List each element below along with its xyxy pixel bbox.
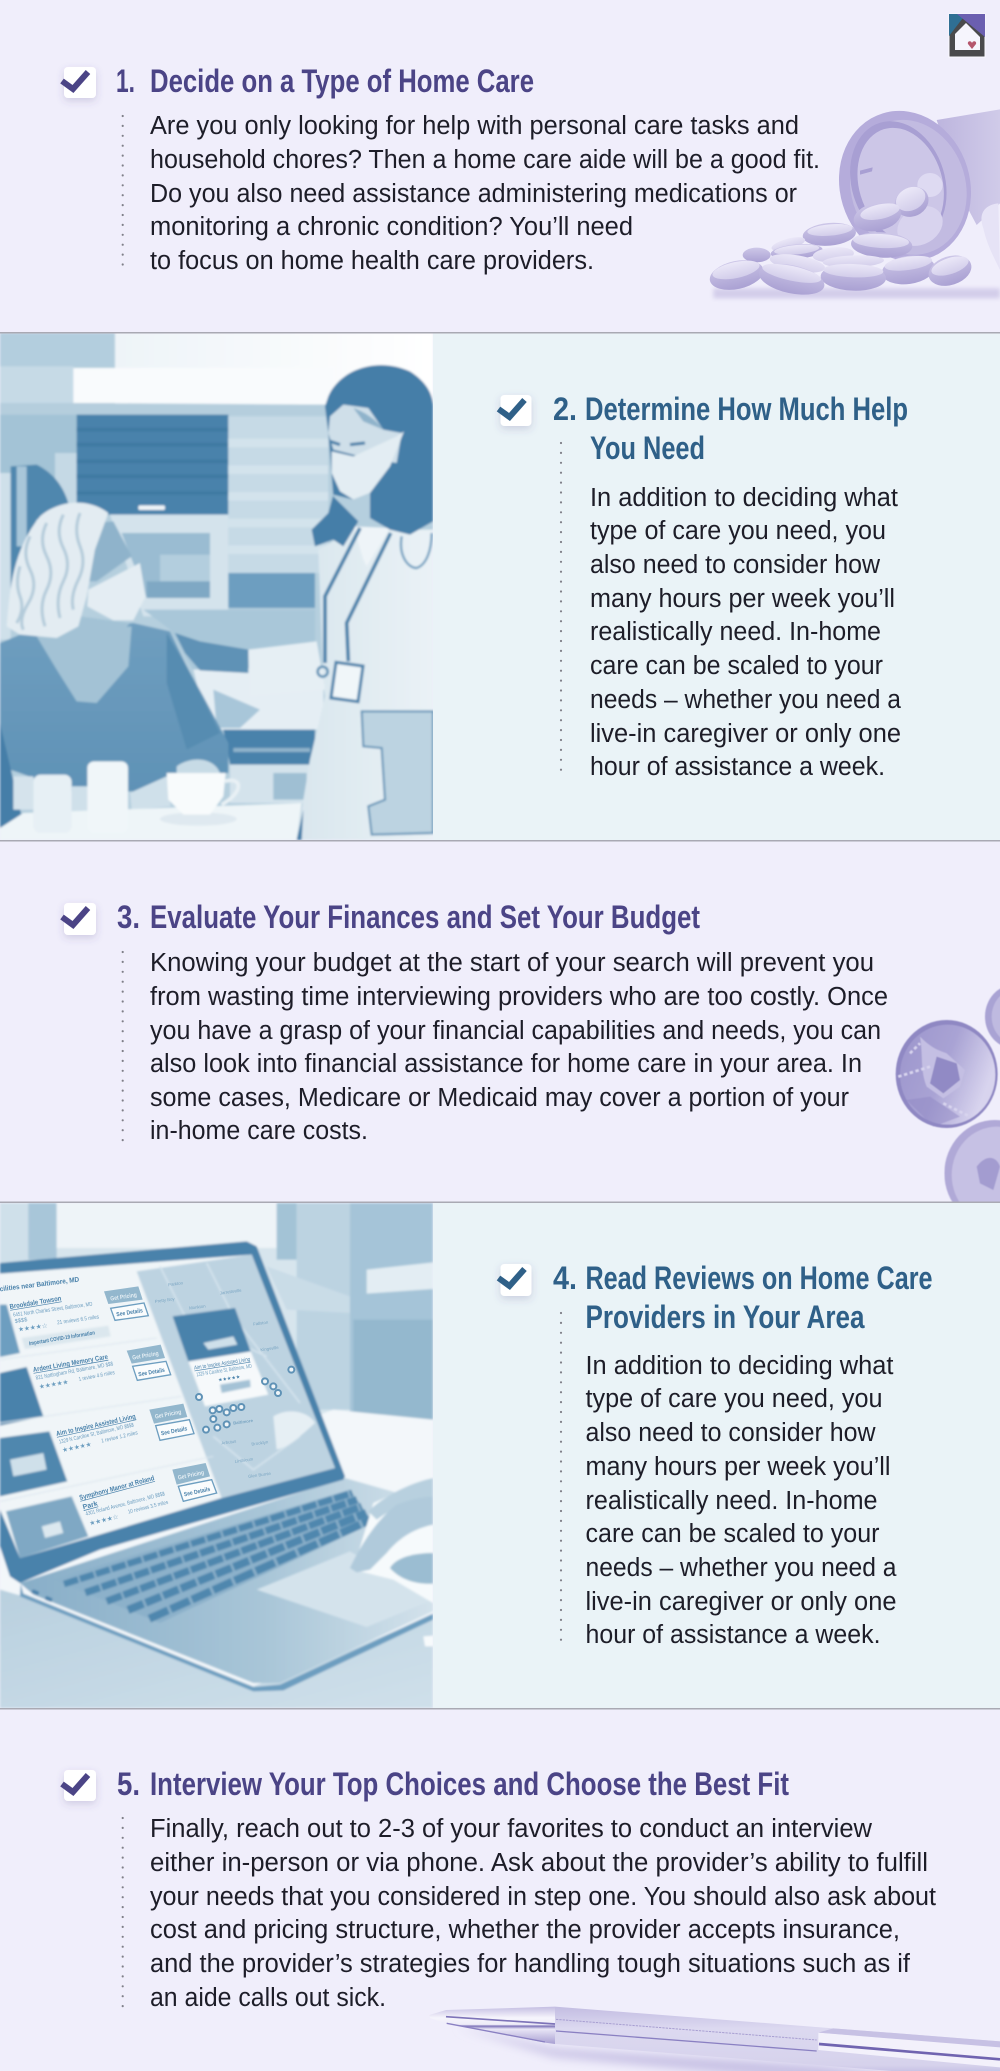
photo: laptop showing provider reviews: [0, 1203, 433, 1708]
body text: [590, 484, 902, 781]
image: coins: [895, 988, 1000, 1202]
listing text on screen: Aim to Inspire Assisted Living: [56, 1414, 137, 1438]
body text: and the provider’s strategies for handling tough situations such as if: [150, 1950, 911, 1978]
map labels: Parkton: [168, 1280, 184, 1287]
body text: many hours per week you’ll: [586, 1453, 890, 1481]
body text: you have a grasp of your financial capabilities and needs, you can: [150, 1017, 881, 1045]
heading: Interview Your Top Choices and Choose the Best Fit: [150, 1766, 789, 1802]
body text: needs – whether you need a: [586, 1554, 897, 1582]
panel: step 2 background: [433, 333, 1000, 840]
panel: step 3: [62, 899, 1000, 1227]
listing buttons: Get Pricing: [132, 1351, 160, 1362]
body text: many hours per week you’ll: [590, 585, 895, 613]
body text: your needs that you considered in step one. You should also ask about: [150, 1883, 936, 1911]
body text: [586, 1352, 897, 1649]
map labels: [154, 1280, 279, 1479]
map labels: Monkton: [189, 1303, 206, 1311]
body text: monitoring a chronic condition? You’ll need: [150, 213, 633, 241]
body text: care can be scaled to your: [590, 652, 883, 680]
body text: Do you also need assistance administering medications or: [150, 180, 797, 208]
listing text on screen: ★★★★★: [38, 1378, 69, 1391]
listing text on screen: Aim to Inspire Assisted Living: [194, 1357, 251, 1372]
heading: 3.: [117, 899, 140, 935]
heading: 2.: [553, 391, 577, 427]
heading: [553, 1260, 932, 1335]
listing text on screen: ★★★★☆: [17, 1322, 48, 1334]
heading: 1.: [116, 63, 135, 99]
heading: Providers in Your Area: [586, 1299, 865, 1335]
map labels: Baltimore: [233, 1418, 254, 1426]
panel: step 5: [62, 1766, 1000, 2071]
listing text on screen: Ardent Living Memory Care: [32, 1354, 109, 1374]
body text: type of care you need, you: [586, 1385, 882, 1413]
map labels: Linthicum: [234, 1456, 254, 1464]
listing text on screen: 1329 N Caroline St, Baltimore, MD: [196, 1364, 252, 1378]
listing text on screen: 21 reviews 6.5 miles: [57, 1314, 100, 1326]
panel: step 4 background: [433, 1203, 1000, 1708]
map pins: [196, 1367, 294, 1433]
body text: also need to consider how: [586, 1419, 876, 1447]
listing text on screen: [0, 1277, 252, 1528]
body text: household chores? Then a home care aide will be a good fit.: [150, 146, 820, 174]
listing text on screen: 1329 N Caroline St, Baltimore, MD $$$$: [58, 1422, 135, 1446]
check box: [62, 903, 96, 935]
listing buttons: Get Pricing: [177, 1470, 205, 1482]
map labels: Arbutus: [221, 1439, 237, 1446]
listing text on screen: 6451 North Charles Street, Baltimore, MD: [13, 1302, 93, 1319]
listing text on screen: ★★★★★: [218, 1374, 241, 1384]
body text: hour of assistance a week.: [586, 1621, 880, 1649]
image: spilled pill bottle: [707, 94, 1000, 300]
check box: [62, 1770, 96, 1801]
panel: step 2: [498, 391, 908, 781]
body text: an aide calls out sick.: [150, 1984, 386, 2012]
listing text on screen: $$$$: [14, 1317, 29, 1325]
body text: Finally, reach out to 2-3 of your favorites to conduct an interview: [150, 1815, 873, 1843]
body text: also look into financial assistance for home care in your area. In: [150, 1050, 862, 1078]
heading: Decide on a Type of Home Care: [150, 63, 534, 99]
body text: [150, 1815, 936, 2012]
body text: some cases, Medicare or Medicaid may cover a portion of your: [150, 1084, 849, 1112]
photo: caregiver and senior woman: [0, 333, 433, 840]
body text: from wasting time interviewing providers who are too costly. Once: [150, 983, 888, 1011]
listing text on screen: Important COVID-19 Information: [29, 1330, 96, 1347]
check box: [498, 395, 532, 426]
image: pen: [429, 2007, 1000, 2071]
listing text on screen: cilities near Baltimore, MD: [0, 1277, 80, 1293]
map labels: Glen Burnie: [248, 1471, 272, 1479]
body text: type of care you need, you: [590, 517, 886, 545]
listing text on screen: Brookdale Towson: [9, 1295, 62, 1311]
listing text on screen: Symphony Manor at Roland: [79, 1475, 155, 1502]
map labels: Jarrettsville: [219, 1288, 242, 1296]
panel: step 1: [62, 63, 1000, 300]
heading: You Need: [590, 430, 705, 466]
body text: [150, 949, 888, 1145]
panel: step 4: [498, 1260, 932, 1649]
listing text on screen: 4301 Roland Avenue, Baltimore, MD $$$$: [85, 1491, 166, 1518]
map labels: Pretty Boy: [154, 1296, 176, 1304]
logo: house with heart: [949, 14, 985, 57]
body text: needs – whether you need a: [590, 686, 902, 714]
body text: hour of assistance a week.: [590, 753, 885, 781]
body text: either in-person or via phone. Ask about the provider’s ability to fulfill: [150, 1849, 928, 1877]
body text: also need to consider how: [590, 551, 881, 579]
listing text on screen: Park: [82, 1501, 99, 1511]
body text: live-in caregiver or only one: [586, 1588, 896, 1616]
listing buttons: Get Pricing: [110, 1293, 138, 1303]
listing text on screen: 1 review 4.6 miles: [78, 1370, 115, 1383]
listing buttons: Get Pricing: [155, 1410, 182, 1421]
body text: realistically need. In-home: [586, 1487, 878, 1515]
check box: [498, 1264, 532, 1296]
listing text on screen: 10 reviews 3.5 miles: [127, 1500, 169, 1516]
body text: [150, 112, 820, 275]
heading: Evaluate Your Finances and Set Your Budget: [150, 899, 700, 935]
heading: [553, 391, 908, 466]
listing buttons: See Details: [183, 1487, 211, 1498]
body text: In addition to deciding what: [590, 484, 898, 512]
body text: cost and pricing structure, whether the provider accepts insurance,: [150, 1916, 900, 1944]
listing buttons: See Details: [116, 1308, 144, 1318]
heading: Determine How Much Help: [585, 391, 908, 427]
body text: to focus on home health care providers.: [150, 247, 594, 275]
heading: 5.: [117, 1766, 140, 1802]
body text: Are you only looking for help with personal care tasks and: [150, 112, 799, 140]
check box: [62, 67, 96, 98]
map labels: Kingsville: [260, 1345, 279, 1352]
listing text on screen: ★★★★★: [61, 1440, 92, 1454]
listing buttons: See Details: [161, 1426, 188, 1437]
heading: 4.: [553, 1260, 577, 1296]
listing text on screen: 1 review 1.2 miles: [101, 1430, 139, 1445]
listing buttons: See Details: [138, 1368, 166, 1378]
body text: live-in caregiver or only one: [590, 720, 901, 748]
map labels: Fallston: [253, 1320, 269, 1327]
map labels: Brooklyn: [251, 1439, 269, 1447]
body text: Knowing your budget at the start of your search will prevent you: [150, 949, 874, 977]
body text: In addition to deciding what: [586, 1352, 894, 1380]
listing buttons: [104, 1286, 217, 1501]
body text: care can be scaled to your: [586, 1520, 880, 1548]
body text: realistically need. In-home: [590, 618, 881, 646]
listing text on screen: 821 Nottingham Rd, Baltimore, MD $$$: [35, 1361, 114, 1382]
listing text on screen: ★★★★☆: [89, 1513, 119, 1528]
body text: in-home care costs.: [150, 1117, 368, 1145]
